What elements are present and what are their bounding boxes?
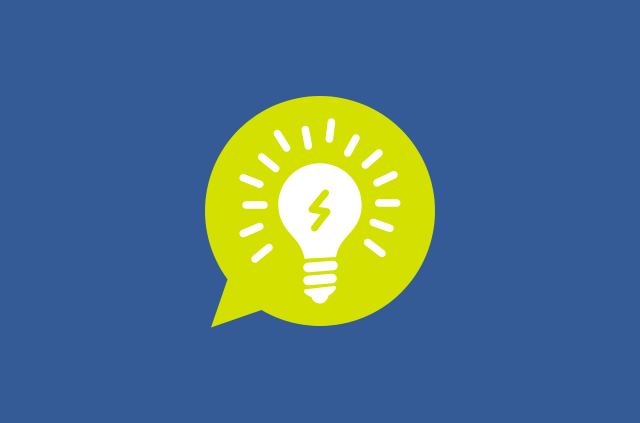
bulb glass bbox=[278, 163, 362, 259]
icon: light rays bbox=[243, 122, 397, 259]
lightning bolt bbox=[312, 193, 327, 228]
bulb screw threads bbox=[308, 266, 333, 280]
bulb base bbox=[304, 286, 336, 304]
icon: light bulb bbox=[278, 163, 362, 304]
speech bubble bbox=[205, 96, 435, 328]
